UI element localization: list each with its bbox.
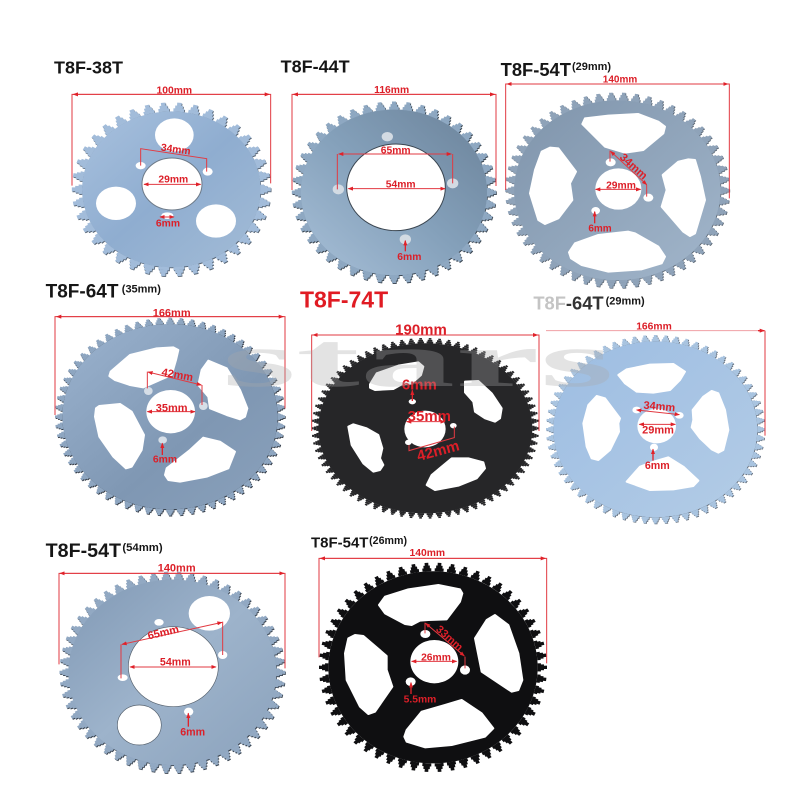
title: T8F-74T: T8F-74T (300, 287, 388, 313)
dimensions: 140mm, 65mm, 54mm, 6mm: 65mm (147, 624, 180, 642)
dimensions: 116mm, 65mm, 54mm, 6mm: 116mm (374, 85, 409, 96)
dimensions: 100mm, 34mm, 29mm, 6mm: 6mm (156, 219, 180, 230)
windows and holes (348, 362, 502, 490)
dimensions: 166mm, 42mm, 35mm, 6mm: 166mm (153, 307, 191, 319)
dimensions: 166mm, 42mm, 35mm, 6mm: 42mm (161, 367, 194, 384)
dimensions: 140mm, 33mm, 26mm, 5.5mm: 140mm (410, 548, 445, 559)
dimensions: 140mm, 34mm, 29mm, 6mm: 29mm (606, 181, 636, 192)
dimensions: 166mm, 34mm, 29mm, 6mm (546, 322, 765, 472)
dimensions: 100mm, 34mm, 29mm, 6mm (72, 85, 271, 230)
panel: T8F-44T sprocket (281, 57, 496, 283)
title: T8F-64T (29mm): (29mm) (606, 296, 645, 308)
dimensions: 100mm, 34mm, 29mm, 6mm: 29mm (158, 175, 188, 186)
gear: 38 teeth (74, 104, 270, 275)
panel: T8F-64T 35mm sprocket (46, 281, 285, 515)
dimensions: 190mm, 6mm, 35mm, 42mm: 42mm (415, 437, 461, 465)
title: T8F-64T (35mm): T8F-64T (46, 281, 118, 302)
gear: 64 teeth (56, 319, 284, 515)
dimensions: 116mm, 65mm, 54mm, 6mm: 65mm (381, 145, 411, 156)
dimensions: 140mm, 34mm, 29mm, 6mm: 140mm (603, 75, 637, 86)
dimensions: 116mm, 65mm, 54mm, 6mm (292, 85, 496, 263)
dimensions: 140mm, 33mm, 26mm, 5.5mm: 5.5mm (404, 694, 436, 705)
dimensions: 140mm, 65mm, 54mm, 6mm: 6mm (180, 727, 205, 739)
title: T8F-54T (29mm): T8F-54T (501, 59, 571, 80)
dimensions: 140mm, 65mm, 54mm, 6mm (59, 562, 285, 739)
dimensions: 140mm, 33mm, 26mm, 5.5mm (319, 548, 547, 705)
dimensions: 166mm, 34mm, 29mm, 6mm: 34mm (643, 400, 676, 414)
windows and holes (583, 364, 728, 490)
title: T8F-54T (54mm): (54mm) (122, 542, 163, 554)
dimensions: 100mm, 34mm, 29mm, 6mm: 100mm (157, 85, 192, 96)
holes (96, 118, 236, 238)
panel: T8F-38T sprocket (54, 57, 271, 275)
windows and holes (95, 347, 247, 482)
gear: 64 teeth (547, 336, 764, 523)
dimensions: 190mm, 6mm, 35mm, 42mm: 190mm (395, 321, 447, 338)
windows and holes (345, 585, 522, 747)
dimensions: 140mm, 65mm, 54mm, 6mm: 54mm (160, 657, 191, 669)
dimensions: 166mm, 42mm, 35mm, 6mm: 6mm (153, 454, 177, 465)
dimensions: 166mm, 34mm, 29mm, 6mm: 6mm (645, 460, 670, 472)
dimensions: 116mm, 65mm, 54mm, 6mm: 6mm (397, 252, 421, 263)
title: T8F-44T: T8F-44T (281, 57, 350, 77)
dimensions: 140mm, 33mm, 26mm, 5.5mm: 33mm (433, 623, 465, 654)
gear: 44 teeth (293, 103, 495, 283)
title: T8F-54T (29mm): (29mm) (572, 61, 611, 73)
title: T8F-64T (29mm): T8F-64T (533, 292, 604, 313)
title: T8F-38T: T8F-38T (54, 57, 123, 77)
dimensions: 190mm, 6mm, 35mm, 42mm (312, 321, 539, 465)
dimensions: 166mm, 34mm, 29mm, 6mm: 29mm (642, 424, 674, 436)
dimensions: 140mm, 34mm, 29mm, 6mm (506, 75, 729, 234)
dimensions: 100mm, 34mm, 29mm, 6mm: 34mm (160, 143, 191, 158)
title: T8F-54T (54mm): T8F-54T (46, 540, 121, 562)
dimensions: 116mm, 65mm, 54mm, 6mm: 54mm (386, 179, 416, 190)
dimensions: 140mm, 34mm, 29mm, 6mm: 34mm (617, 151, 649, 182)
dimensions: 166mm, 42mm, 35mm, 6mm: 35mm (156, 403, 188, 415)
gear: 54 teeth (61, 573, 284, 773)
holes (117, 596, 230, 745)
dimensions: 140mm, 65mm, 54mm, 6mm: 140mm (158, 562, 196, 574)
dimensions: 140mm, 33mm, 26mm, 5.5mm: 26mm (421, 653, 451, 664)
title: T8F-64T (35mm): (35mm) (122, 284, 161, 296)
panel: T8F-54T 26mm sprocket (311, 535, 547, 770)
panel: T8F-54T 29mm sprocket (501, 59, 729, 287)
gear: 54 teeth (321, 564, 545, 770)
title: T8F-54T (26mm): T8F-54T (311, 535, 368, 552)
panel: T8F-54T 54mm sprocket (46, 540, 285, 773)
bolt holes (144, 387, 208, 444)
gear: 74 teeth (313, 339, 538, 518)
title: T8F-54T (26mm): (26mm) (369, 535, 407, 547)
panel: T8F-64T 29mm sprocket (533, 292, 765, 523)
dimensions: 140mm, 34mm, 29mm, 6mm: 6mm (588, 223, 612, 234)
dimensions: 166mm, 34mm, 29mm, 6mm: 166mm (636, 322, 672, 333)
panel: T8F-74T sprocket (300, 287, 539, 518)
holes (333, 132, 458, 244)
windows and holes (530, 114, 705, 272)
dimensions: 166mm, 42mm, 35mm, 6mm (55, 307, 285, 465)
dimensions: 190mm, 6mm, 35mm, 42mm: 35mm (408, 408, 451, 425)
gear: 54 teeth (507, 94, 729, 287)
watermark: stars: stars (222, 316, 614, 403)
dimensions: 190mm, 6mm, 35mm, 42mm: 6mm (402, 376, 437, 393)
